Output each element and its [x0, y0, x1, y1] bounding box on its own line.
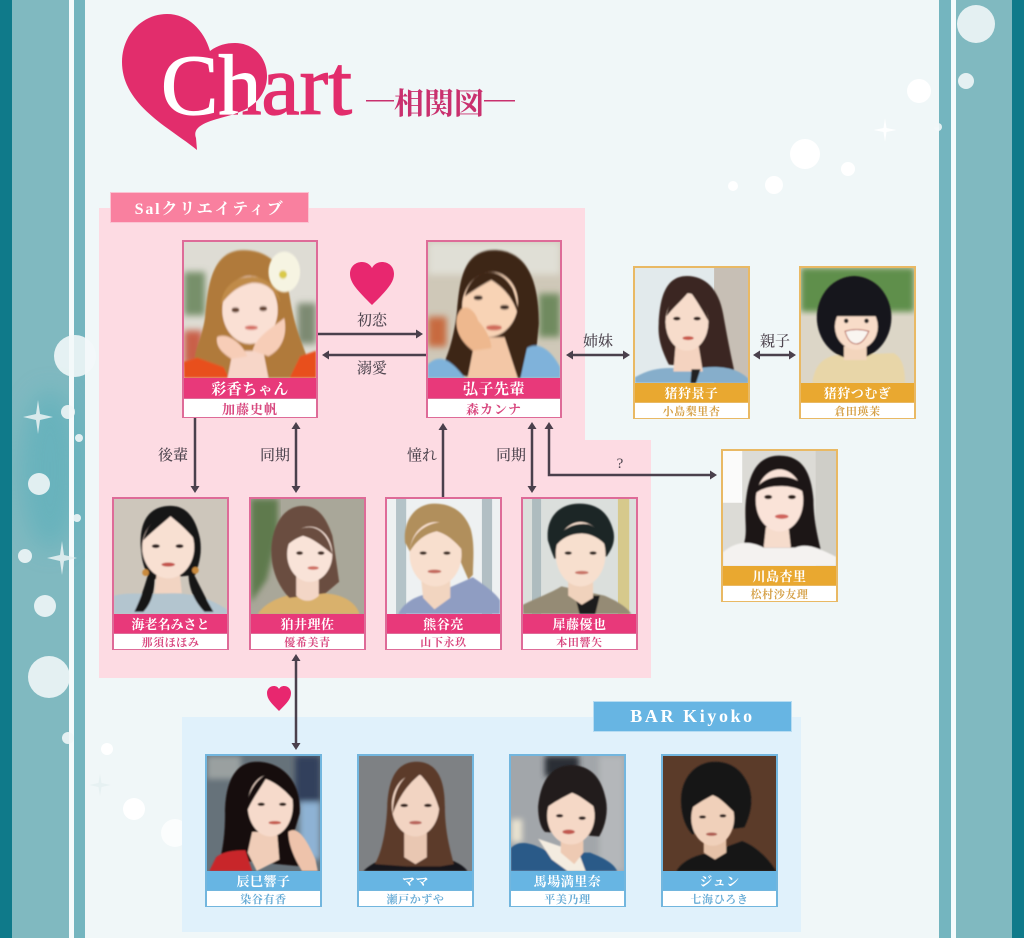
portrait: [207, 756, 320, 871]
actor: 松村沙友理: [750, 588, 808, 600]
actor: 本田響矢: [556, 636, 603, 648]
name: [801, 383, 914, 402]
portrait: [359, 756, 472, 871]
name: [114, 614, 227, 633]
heading: Salクリエイティブ: [110, 192, 309, 223]
portrait: [184, 242, 316, 378]
arrow: 同期 right: [496, 422, 536, 493]
name: 弘子先輩: [463, 382, 525, 398]
card: 海老名みさと: [112, 497, 229, 650]
name: [723, 566, 836, 585]
actor: 小島梨里杏: [662, 406, 720, 418]
arrow: 憧れ: [407, 423, 448, 497]
title word: Chart: Chart: [161, 37, 352, 133]
card: ママ: [357, 754, 474, 907]
card: ジュン: [661, 754, 778, 907]
name: 猪狩つむぎ: [824, 386, 891, 401]
panel: BAR Kiyoko background: [182, 717, 801, 932]
heading: BAR Kiyoko: [593, 701, 792, 732]
name: [251, 614, 364, 633]
actor: 七海ひろき: [690, 894, 748, 906]
arrow: 姉妹: [566, 332, 630, 360]
actor: 加藤史帆: [222, 402, 278, 416]
icon: big heart: [122, 14, 267, 150]
name: [635, 383, 748, 402]
name: [387, 614, 500, 633]
card: 辰巳響子: [205, 754, 322, 907]
card: 猪狩つむぎ: [799, 266, 916, 419]
name: 辰巳響子: [236, 874, 290, 889]
portrait: [723, 451, 836, 566]
card: 犀藤優也: [521, 497, 638, 650]
arrow: 親子: 親子: [760, 332, 790, 350]
arrow: 後輩: [158, 418, 200, 493]
arrow: 溺愛: 溺愛: [357, 360, 387, 377]
arrow: question: [544, 422, 717, 480]
card: 猪狩景子: [633, 266, 750, 419]
title: Chart heart logo: [122, 14, 515, 150]
actor: [801, 402, 914, 418]
name: [511, 871, 624, 890]
portrait: [523, 499, 636, 614]
heading: BAR Kiyoko: BAR Kiyoko: [630, 706, 755, 726]
name: ジュン: [699, 874, 740, 889]
actor: 瀬戸かずや: [386, 894, 444, 906]
arrow: 初恋: 初恋: [357, 311, 388, 329]
actor: [114, 633, 227, 649]
actor: [359, 890, 472, 906]
name: [207, 871, 320, 890]
portrait: [801, 268, 914, 383]
name: 狛井理佐: [280, 617, 334, 632]
icon: large heart: [350, 262, 394, 305]
name: 海老名みさと: [131, 617, 210, 632]
actor: 森カンナ: [466, 402, 522, 416]
arrow: 狛井 to 辰巳: [292, 654, 300, 750]
arrow: 初恋: [318, 311, 423, 338]
card: 川島杏里: [721, 449, 838, 602]
actor: [387, 633, 500, 649]
arrow: 同期 right: 同期: [496, 447, 526, 464]
name: 馬場満里奈: [534, 874, 601, 889]
name: 犀藤優也: [552, 617, 606, 632]
portrait: [387, 499, 500, 614]
arrow: question: ?: [617, 456, 624, 472]
actor: 平美乃理: [544, 894, 591, 906]
portrait: [251, 499, 364, 614]
card: 熊谷亮: [385, 497, 502, 650]
actor: 優希美青: [284, 636, 331, 648]
name: [663, 871, 776, 890]
portrait: [511, 756, 624, 871]
portrait: [635, 268, 748, 383]
card: 弘子先輩: [426, 240, 562, 418]
arrow: 姉妹: 姉妹: [583, 332, 613, 350]
arrow: 後輩: 後輩: [158, 446, 188, 464]
actor: [207, 890, 320, 906]
actor: 染谷有香: [240, 894, 287, 906]
arrow: 親子: [753, 332, 796, 360]
name: 熊谷亮: [423, 617, 464, 632]
portrait: [114, 499, 227, 614]
actor: [428, 398, 560, 417]
actor: 那須ほほみ: [142, 636, 200, 648]
panel: Salクリエイティブ background: [99, 208, 651, 678]
actor: 山下永玖: [420, 636, 467, 648]
actor: [523, 633, 636, 649]
icon: small heart: [267, 686, 291, 711]
name: [523, 614, 636, 633]
card: 馬場満里奈: [509, 754, 626, 907]
name: [359, 871, 472, 890]
actor: [251, 633, 364, 649]
actor: [723, 585, 836, 601]
arrow: 憧れ: 憧れ: [407, 446, 437, 464]
card: 彩香ちゃん: [182, 240, 318, 418]
heading: Salクリエイティブ: Salクリエイティブ: [135, 201, 284, 218]
arrow: 同期 left: [260, 422, 300, 493]
actor: [184, 398, 316, 417]
name: 川島杏里: [752, 569, 806, 584]
name: 猪狩景子: [664, 386, 718, 401]
name: [184, 378, 316, 398]
portrait: [663, 756, 776, 871]
actor: 倉田瑛茉: [834, 406, 881, 418]
arrow: 同期 left: 同期: [260, 447, 290, 464]
name: ママ: [402, 874, 429, 889]
actor: [663, 890, 776, 906]
card: 狛井理佐: [249, 497, 366, 650]
arrow: 溺愛: [322, 350, 426, 377]
subtitle: 相関図: 相関図: [394, 88, 484, 121]
name: 彩香ちゃん: [211, 382, 289, 398]
portrait: [428, 242, 560, 378]
name: [428, 378, 560, 398]
actor: [511, 890, 624, 906]
actor: [635, 402, 748, 418]
